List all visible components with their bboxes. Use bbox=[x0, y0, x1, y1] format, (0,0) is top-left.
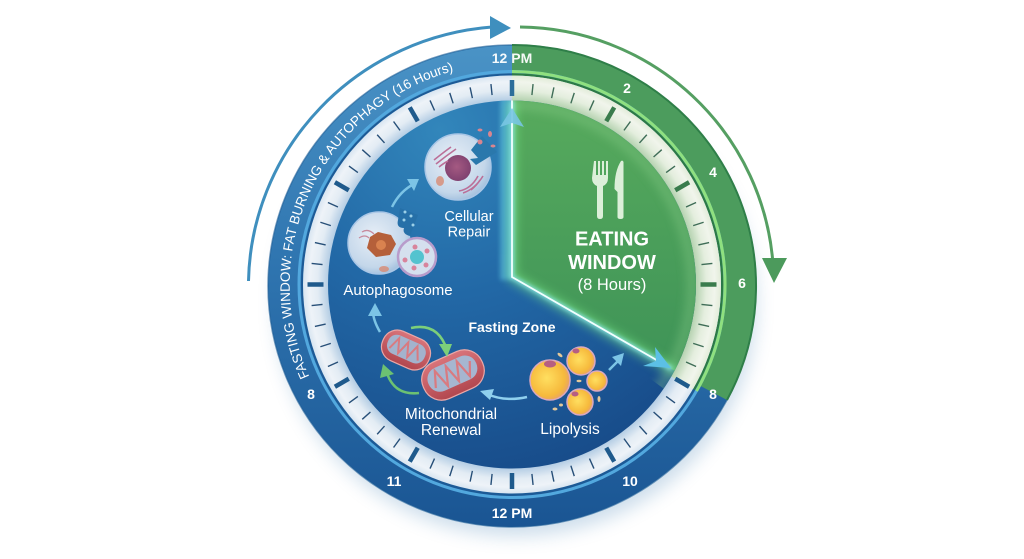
small mitochondrion bbox=[377, 325, 435, 375]
label: mitochondrial renewal: Renewal bbox=[421, 422, 481, 439]
outer arrow: fasting direction bbox=[248, 16, 511, 281]
fasting zone disc bbox=[328, 100, 696, 468]
arrow: lipolysis to mitochondria bbox=[480, 389, 527, 400]
major ticks bbox=[308, 80, 716, 489]
band hour labels: 2 bbox=[623, 80, 631, 96]
label: autophagosome: Autophagosome bbox=[343, 282, 453, 299]
infographic: fasting clock bbox=[247, 16, 787, 544]
band hour labels: 12 PM bbox=[492, 505, 532, 521]
eating window label bbox=[568, 228, 656, 294]
soft shadow under clock bbox=[276, 72, 756, 536]
band hour labels: 8 bbox=[307, 386, 315, 402]
label: lipolysis: Lipolysis bbox=[540, 421, 600, 438]
band hour labels: 6 bbox=[738, 275, 746, 291]
outer arrow: eating direction bbox=[520, 27, 787, 283]
arrow: autophagosome to repair bbox=[392, 179, 419, 207]
label: cellular repair: Repair bbox=[448, 224, 491, 240]
eating window label: (8 Hours) bbox=[578, 276, 646, 294]
curved band label: FASTING WINDOW: FAT BURNING & AUTOPHAGY (16 Hours) bbox=[280, 62, 452, 380]
label: mitochondrial renewal bbox=[405, 406, 497, 439]
label: cellular repair bbox=[444, 209, 494, 240]
eating window label: WINDOW bbox=[568, 252, 656, 274]
icon: repaired cell bbox=[425, 128, 497, 200]
band hour labels: 8 bbox=[709, 386, 717, 402]
divider arrow to 8 bbox=[643, 347, 671, 368]
large mitochondrion bbox=[416, 344, 490, 406]
eating window label: EATING bbox=[575, 228, 649, 250]
minor ticks: eating side bbox=[532, 84, 712, 366]
band hour labels: 12 PM bbox=[492, 50, 532, 66]
small arrow: fat release bbox=[609, 353, 624, 370]
clock outer band bbox=[268, 45, 756, 527]
divider arrow up at 12 bbox=[500, 108, 524, 127]
icon: autophagosome bbox=[348, 208, 436, 276]
icon: mitochondria bbox=[377, 325, 490, 406]
band hour labels: 10 bbox=[622, 473, 638, 489]
band hour labels bbox=[307, 50, 746, 521]
eating window wedge bbox=[498, 100, 696, 388]
label: mitochondrial renewal: Mitochondrial bbox=[405, 406, 497, 423]
icon: fat cells bbox=[530, 347, 607, 415]
icon: fork and knife bbox=[592, 161, 624, 219]
label: cellular repair: Cellular bbox=[444, 209, 494, 225]
tick ring bbox=[303, 76, 721, 494]
arrow: mitochondria to autophagosome bbox=[368, 303, 382, 332]
green renewal arrows bbox=[380, 327, 452, 393]
minor ticks: fasting side bbox=[312, 84, 675, 485]
band hour labels: 4 bbox=[709, 164, 717, 180]
band hour labels: 11 bbox=[387, 473, 402, 489]
fasting zone label: Fasting Zone bbox=[468, 319, 556, 335]
